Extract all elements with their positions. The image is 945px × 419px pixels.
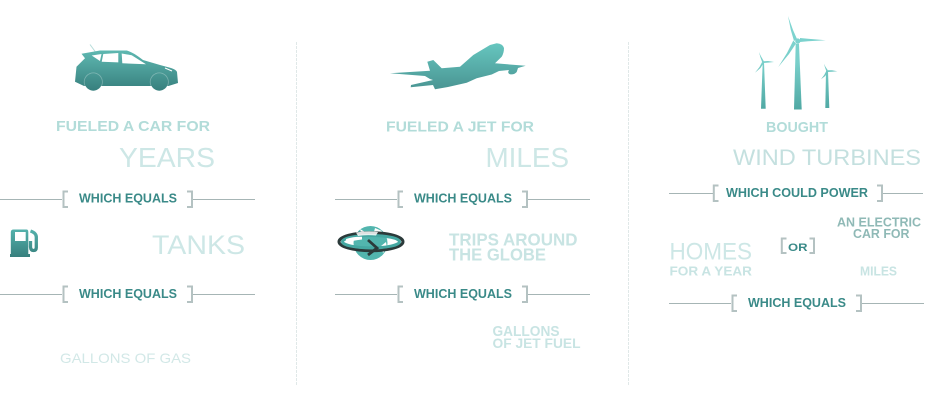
icon: jet <box>390 43 526 89</box>
text: miles: MILES <box>860 264 897 278</box>
icon: globe with orbit arrow <box>339 226 403 260</box>
text: trips around the globe: THE GLOBE <box>449 244 546 264</box>
heading: bought: BOUGHT <box>766 119 828 136</box>
divider label: which equals: WHICH EQUALS <box>748 296 846 310</box>
text: years: YEARS <box>119 142 215 173</box>
label: or <box>782 238 814 254</box>
text: gallons of jet fuel <box>492 324 581 351</box>
icon: fuel pump <box>10 230 36 257</box>
heading: fueled a car for: FUELED A CAR FOR <box>56 118 210 135</box>
text: an electric car for: CAR FOR <box>853 226 910 241</box>
divider label: which could power: WHICH COULD POWER <box>726 186 868 200</box>
text: an electric car for <box>837 214 921 241</box>
divider label: which equals: WHICH EQUALS <box>79 192 177 206</box>
icon: wind turbines <box>755 16 837 110</box>
text: gallons of jet fuel: GALLONS <box>492 324 560 340</box>
text: trips around the globe: TRIPS AROUND <box>449 230 578 250</box>
text: tanks: TANKS <box>152 230 245 260</box>
label: or: OR <box>788 242 808 254</box>
text: an electric car for: AN ELECTRIC <box>837 214 921 230</box>
divider label: which equals <box>335 192 590 207</box>
divider label: which equals: WHICH EQUALS <box>414 192 512 206</box>
text: gallons of jet fuel: OF JET FUEL <box>492 335 581 351</box>
text: miles: MILES <box>486 142 569 173</box>
text: homes: HOMES <box>670 238 752 266</box>
divider label: which equals <box>0 286 255 302</box>
divider: right <box>628 42 630 386</box>
text: trips around the globe <box>449 230 578 264</box>
divider label: which could power <box>669 186 923 201</box>
divider label: which equals <box>669 296 924 311</box>
divider label: which equals <box>335 286 590 302</box>
heading: fueled a jet for: FUELED A JET FOR <box>386 118 534 136</box>
icon: car <box>75 44 178 92</box>
divider label: which equals: WHICH EQUALS <box>414 287 512 301</box>
divider label: which equals <box>0 192 255 207</box>
divider label: which equals: WHICH EQUALS <box>79 287 177 301</box>
panel: wind turbines <box>669 16 924 311</box>
panel: car <box>0 44 255 366</box>
text: for a year: FOR A YEAR <box>670 264 753 278</box>
divider: left <box>296 42 298 386</box>
text: gallons of gas: GALLONS OF GAS <box>60 350 191 366</box>
panel: jet <box>335 43 590 351</box>
text: wind turbines: WIND TURBINES <box>733 145 921 170</box>
